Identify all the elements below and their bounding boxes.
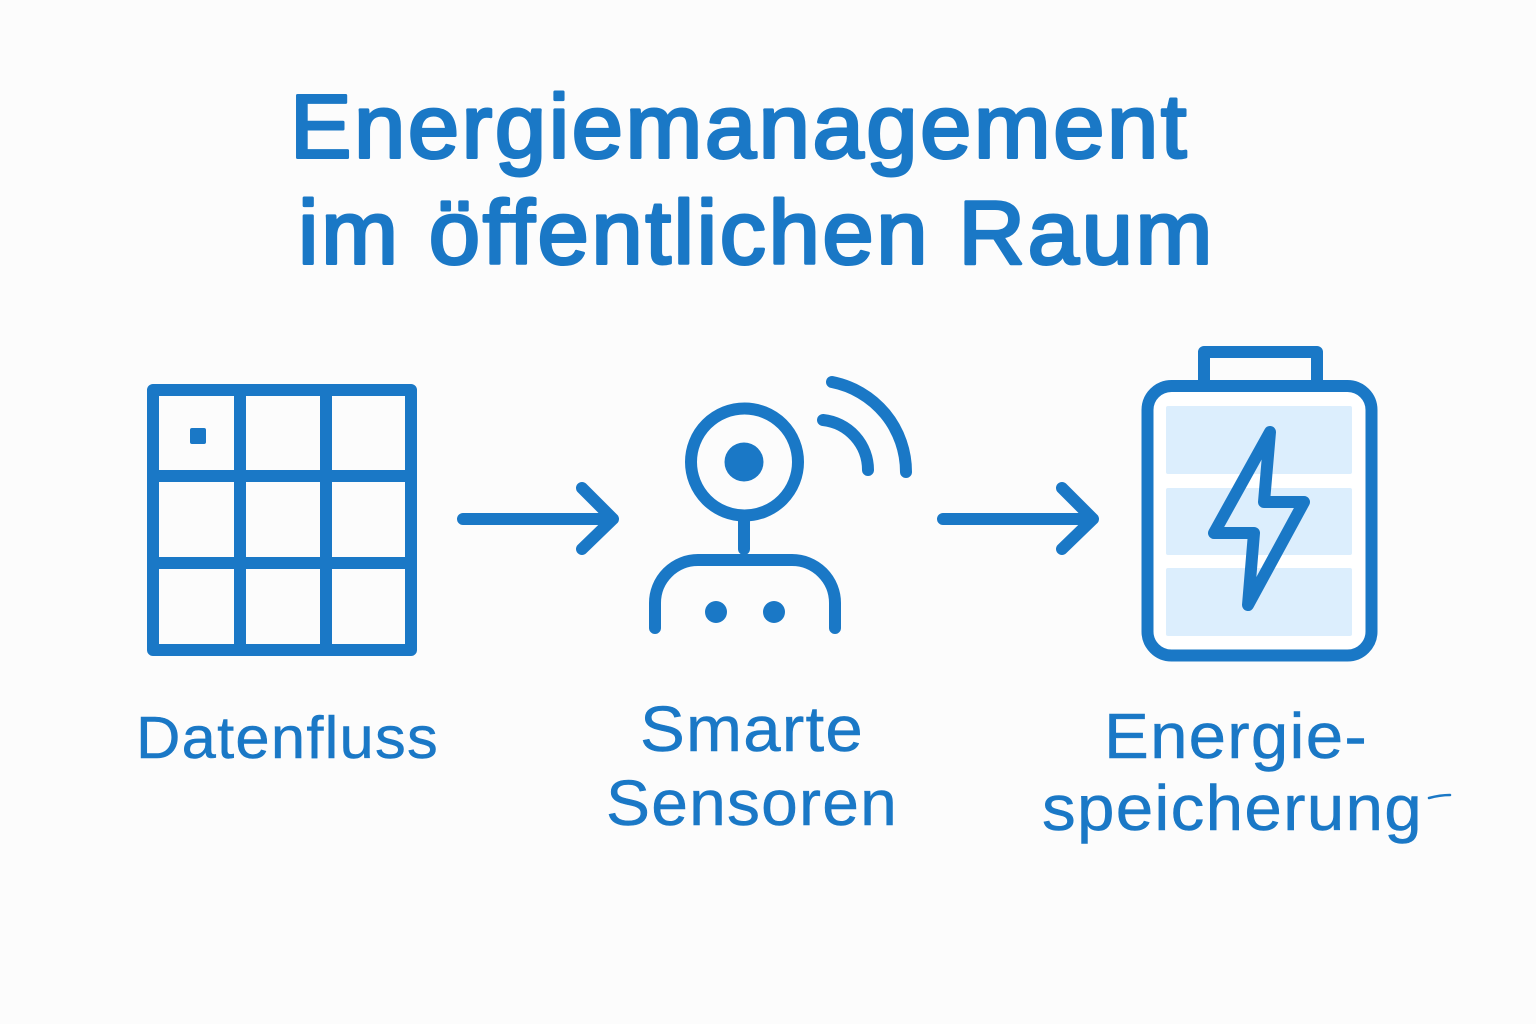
label: Energiespeicherung (1042, 700, 1423, 844)
arrow: grid to sensor (463, 488, 613, 549)
label: Smarte Sensoren (606, 693, 898, 839)
title (290, 77, 1215, 283)
icon: battery (1148, 352, 1372, 656)
label: Smarte Sensoren: Sensoren (606, 767, 898, 839)
title: Energiemanagement (290, 77, 1189, 177)
arrow: sensor to battery (943, 488, 1093, 549)
icon: smart sensor (655, 382, 906, 628)
icon: data grid (153, 390, 411, 650)
label: Energiespeicherung: speicherung (1042, 772, 1423, 844)
title: im öffentlichen Raum (298, 183, 1215, 283)
label: Smarte Sensoren: Smarte (640, 693, 864, 765)
stray mark after speicherung (1429, 795, 1450, 798)
label: Energiespeicherung: Energie- (1104, 700, 1368, 772)
label: Datenfluss: Datenfluss (136, 705, 439, 771)
